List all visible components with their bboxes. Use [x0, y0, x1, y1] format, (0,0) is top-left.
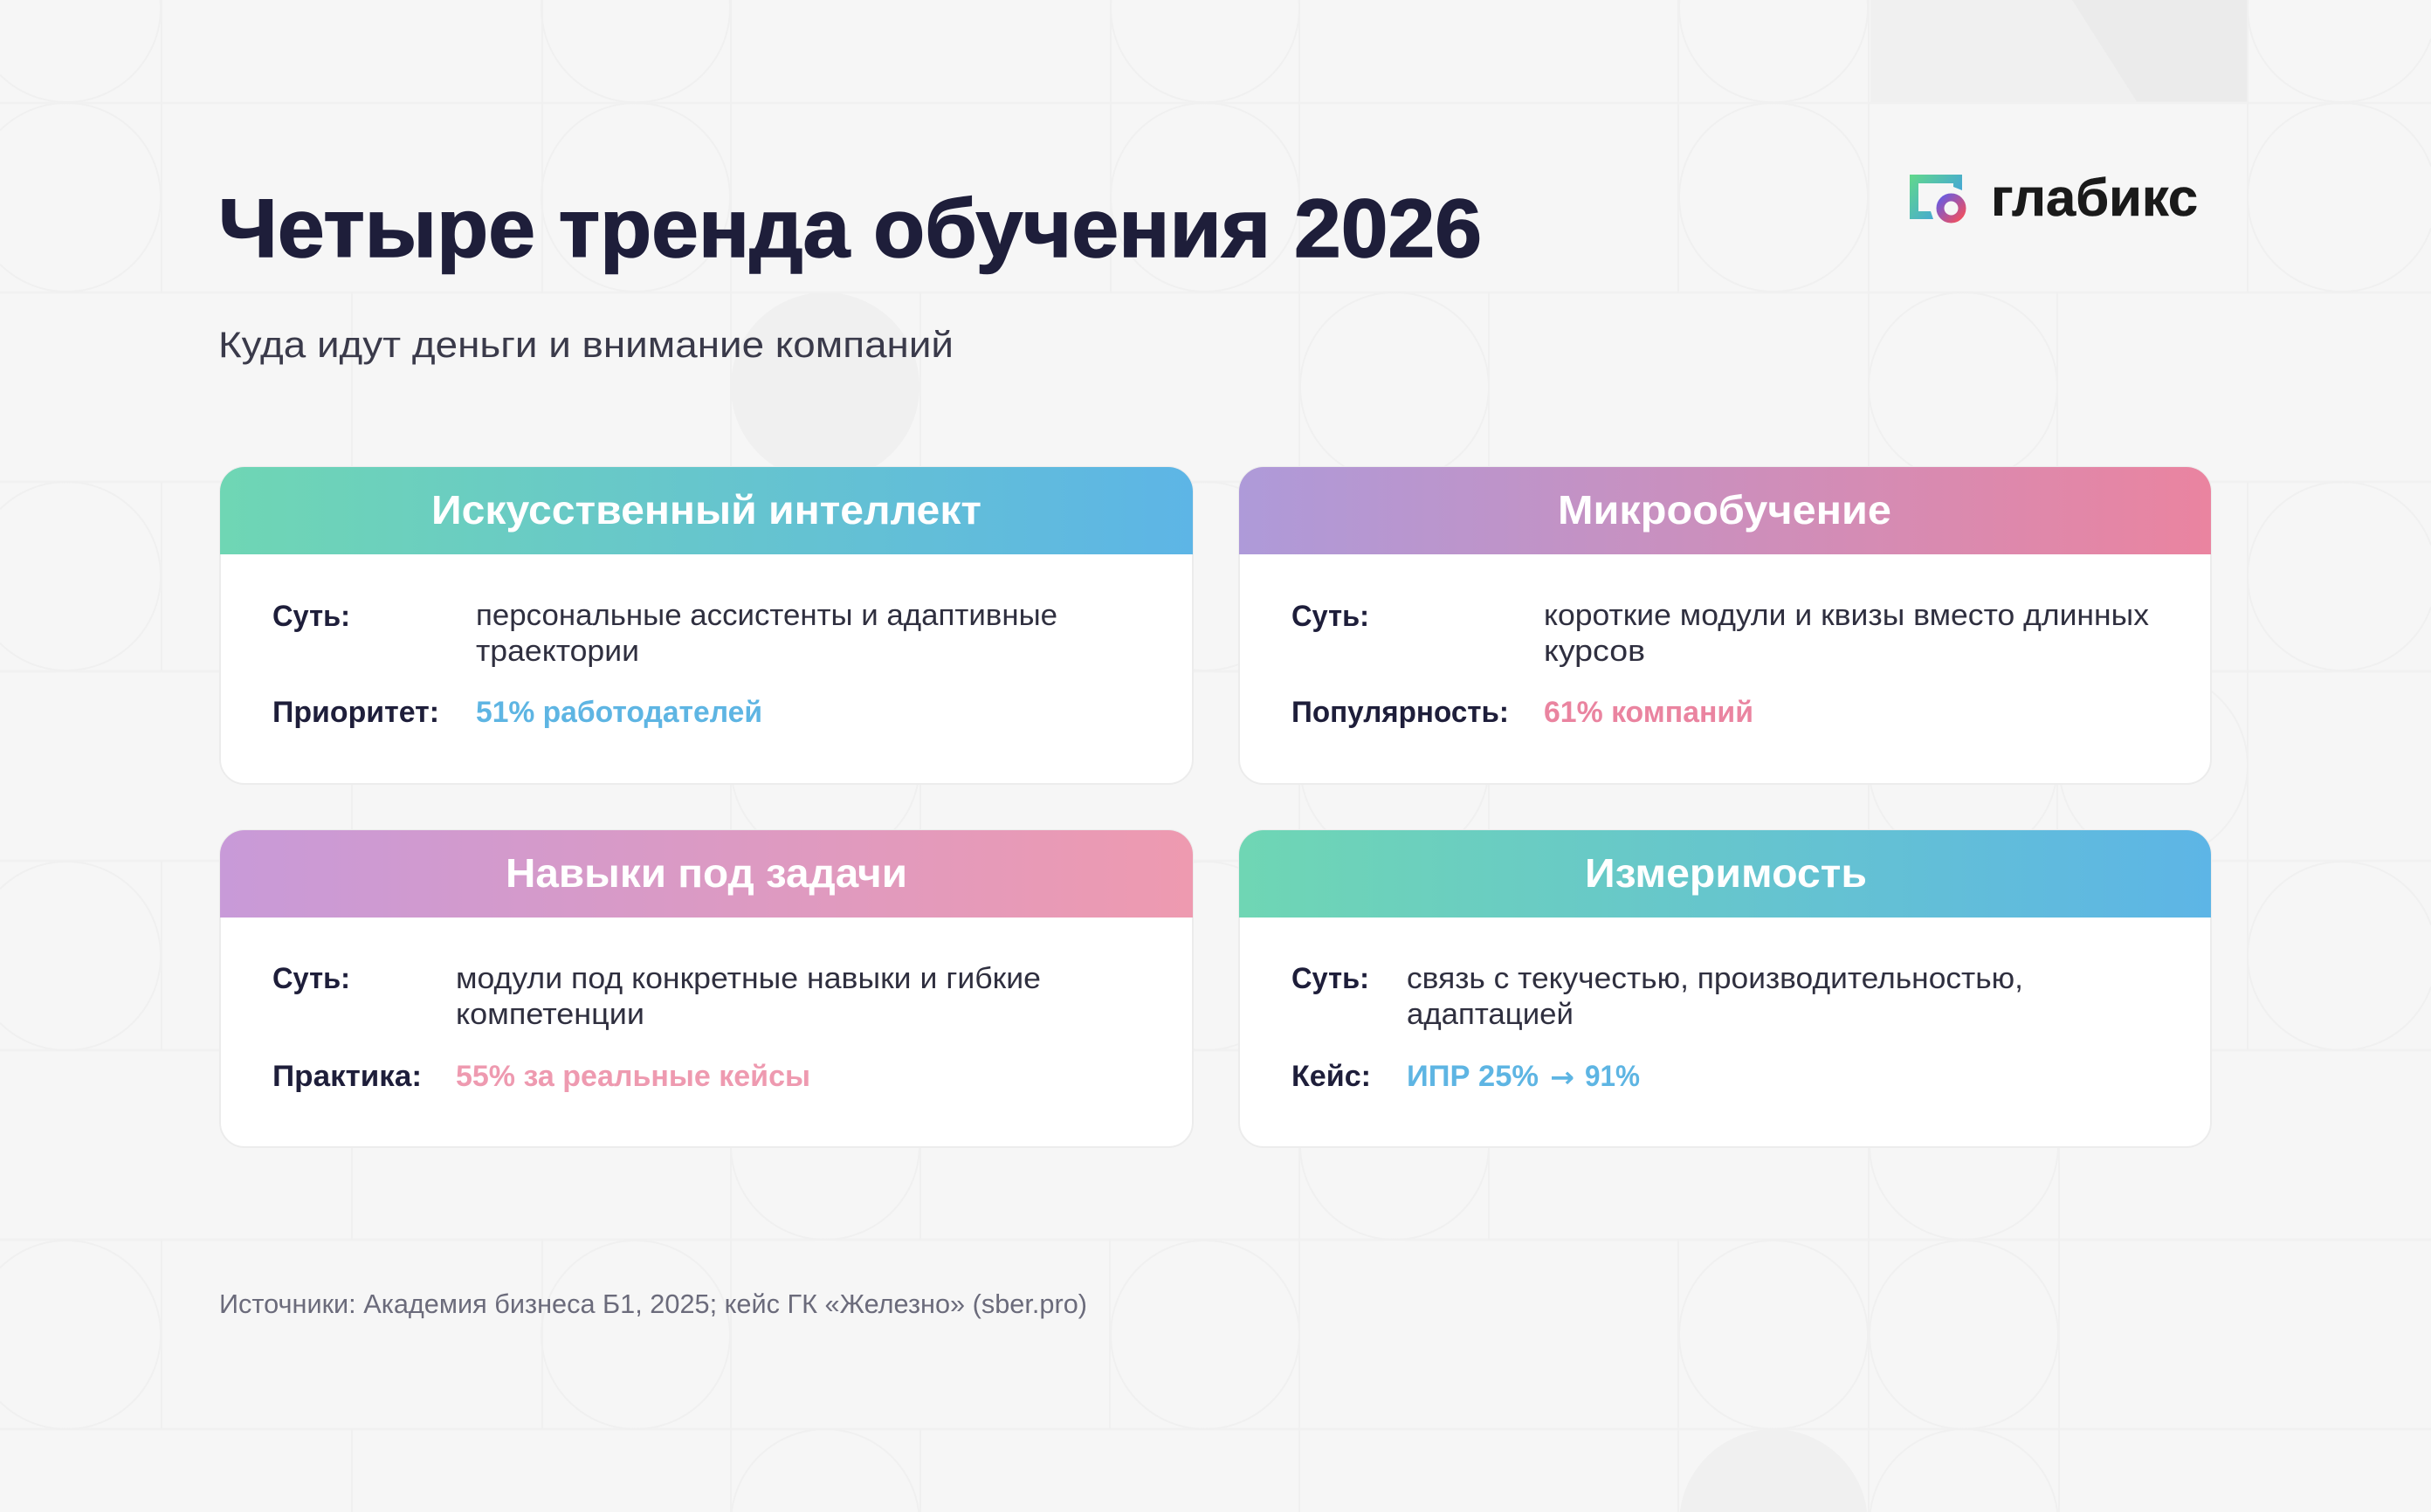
- description: [476, 599, 1057, 668]
- description: модули под конкретные навыки и гибкие: [456, 962, 1041, 995]
- value: ИПР: [1407, 1060, 1640, 1094]
- label: Популярность: Популярность:: [1291, 696, 1509, 729]
- panel header: [1239, 830, 2211, 918]
- description: адаптацией: [1407, 998, 1574, 1031]
- value: ИПР: 91%: [1585, 1060, 1640, 1093]
- panel: Искусственный интеллект: [220, 467, 1193, 784]
- label: Суть: Суть:: [1291, 600, 1369, 633]
- footer: sources: Источники: Академия бизнеса Б1, 2025; кейс ГК «Железно» (sber.pro): [219, 1289, 1087, 1319]
- description: траектории: [476, 635, 639, 668]
- panel: Микрообучение: [1239, 467, 2211, 784]
- panel header: [220, 830, 1193, 918]
- label: Суть: Суть:: [272, 962, 350, 995]
- label: Приоритет: Приоритет:: [272, 696, 439, 729]
- description: [1544, 599, 2149, 668]
- value: 55%: 55% за реальные кейсы: [456, 1060, 810, 1093]
- description: [456, 962, 1041, 1031]
- panel heading: Навыки под задачи: [506, 850, 907, 896]
- value: ИПР: →: [1550, 1061, 1574, 1094]
- description: связь с текучестью, производительностью,: [1407, 962, 2023, 995]
- description: короткие модули и квизы вместо длинных: [1544, 599, 2149, 632]
- description: [1407, 962, 2023, 1031]
- description: курсов: [1544, 635, 1645, 668]
- value: ИПР: ИПР 25%: [1407, 1060, 1539, 1093]
- label: Практика: Практика:: [272, 1060, 422, 1093]
- panel: Навыки под задачи: [220, 830, 1193, 1147]
- logo: глабикс: [1910, 168, 2198, 227]
- panel heading: Микрообучение: [1558, 487, 1891, 533]
- panel heading: Измеримость: [1585, 850, 1867, 896]
- label: Кейс: Кейс:: [1291, 1060, 1371, 1093]
- panel heading: Искусственный интеллект: [431, 487, 981, 533]
- description: персональные ассистенты и адаптивные: [476, 599, 1057, 632]
- label: Суть: Суть:: [272, 600, 350, 633]
- logo wordmark: глабикс: [1991, 168, 2198, 227]
- subtitle: Куда идут деньги и внимание компаний: [218, 324, 954, 365]
- title: Четыре тренда обучения 2026: [218, 182, 1482, 275]
- value: 51%: 51% работодателей: [476, 696, 762, 729]
- panel header: [1239, 467, 2211, 554]
- value: 61%: 61% компаний: [1544, 696, 1753, 729]
- icon: logo square and ring: [1910, 175, 1962, 219]
- description: компетенции: [456, 998, 644, 1031]
- panel: Измеримость: [1239, 830, 2211, 1147]
- label: Суть: Суть:: [1291, 962, 1369, 995]
- panel header: [220, 467, 1193, 554]
